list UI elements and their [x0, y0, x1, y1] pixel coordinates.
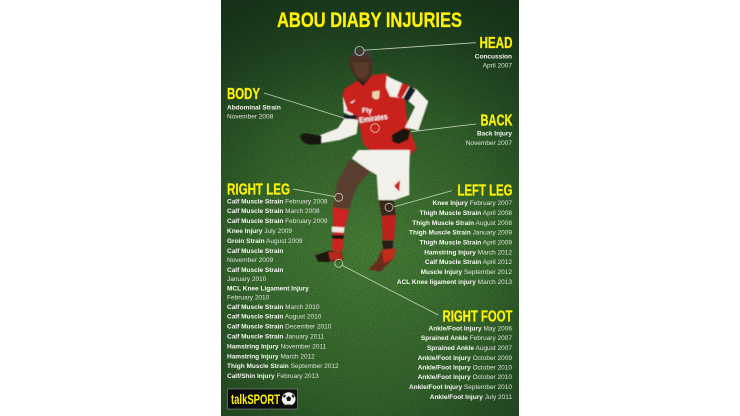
panel: right leg: Calf Muscle Strain December 2010 [227, 324, 332, 330]
panel: right foot: Ankle/Foot Injury October 2009 [418, 355, 512, 362]
panel: right leg: Calf Muscle Strain August 2010 [227, 314, 322, 320]
panel: right foot: Ankle/Foot Injury October 2010 [418, 364, 512, 372]
logo: talkSPORT: talkSPORT [231, 392, 281, 407]
panel: body: Abdominal Strain [227, 104, 281, 111]
panel: left leg: Thigh Muscle Strain April 2009 [420, 240, 512, 246]
panel: back: Back Injury [477, 131, 512, 138]
panel: left leg: Knee Injury February 2007 [432, 200, 512, 207]
panel: left leg [397, 182, 512, 286]
right foot marker [335, 259, 438, 315]
panel: left leg: Hamstring Injury March 2012 [424, 250, 512, 256]
panel: right leg: November 2009 [227, 257, 274, 264]
right leg marker [293, 189, 343, 201]
left leg marker [385, 191, 452, 211]
panel: right leg: Calf Muscle Strain February 2008 [227, 198, 328, 206]
panel: left leg: Thigh Muscle Strain January 2009 [409, 230, 512, 236]
panel: right leg: Calf Muscle Strain [227, 248, 283, 255]
panel: right leg: Groin Strain August 2009 [227, 238, 303, 245]
panel: right leg: Calf Muscle Strain January 2011 [227, 334, 324, 340]
panel: right foot: Ankle/Foot Injury May 2006 [429, 326, 512, 332]
body and back markers [264, 93, 476, 132]
panel: right leg: Calf Muscle Strain [227, 267, 283, 274]
panel: right leg: Calf Muscle Strain March 2010 [227, 304, 320, 311]
panel: right foot: Ankle/Foot Injury September 2010 [409, 384, 512, 391]
panel: body: November 2008 [227, 114, 274, 121]
panel: right leg: Knee Injury July 2009 [227, 228, 292, 235]
panel: back: BACK [480, 112, 513, 130]
panel: right leg: Calf/Shin Injury February 2013 [227, 373, 319, 380]
panel: head: Concussion [475, 53, 512, 60]
panel: back [466, 112, 513, 147]
panel: left leg: ACL Knee ligament injury March 2013 [397, 279, 512, 286]
player upper body: Emirates [358, 112, 389, 125]
panel: left leg: Thigh Muscle Strain April 2008 [420, 210, 512, 217]
panel: right foot: Ankle/Foot Injury July 2011 [430, 394, 512, 401]
player figure [300, 49, 428, 272]
panel: right leg: January 2010 [227, 276, 267, 283]
panel: right leg: RIGHT LEG [227, 182, 290, 198]
panel: right leg: Hamstring Injury March 2012 [227, 354, 315, 360]
panel: right leg: Thigh Muscle Strain September 2012 [227, 363, 339, 370]
panel: left leg: LEFT LEG [458, 182, 512, 200]
panel: back: November 2007 [466, 140, 512, 147]
panel: right leg: Hamstring Injury November 2011 [227, 344, 327, 350]
panel: left leg: Calf Muscle Strain April 2012 [425, 259, 512, 266]
panel: left leg: Thigh Muscle Strain August 2008 [412, 220, 512, 227]
panel: right leg [227, 182, 339, 380]
player upper body [300, 49, 428, 160]
icon: football [282, 392, 296, 406]
panel: body [227, 86, 281, 121]
title: ABOU DIABY INJURIES [277, 9, 462, 32]
panel: head: April 2007 [483, 63, 512, 70]
panel: right foot: RIGHT FOOT [442, 308, 513, 326]
player lower body [315, 150, 410, 272]
panel: right foot: Sprained Ankle February 2007 [421, 335, 512, 342]
panel: right foot: Sprained Ankle August 2007 [427, 345, 512, 352]
head marker [355, 43, 476, 56]
panel: head: HEAD [480, 35, 512, 52]
logo: talkSPORT [228, 389, 298, 409]
marker lines and circles [264, 43, 476, 315]
shirt sponsor: Fly [362, 108, 372, 115]
panel: right foot [409, 308, 513, 401]
panel: right foot: Ankle/Foot Injury October 2010 [418, 374, 512, 381]
panel: right leg: Calf Muscle Strain March 2008 [227, 208, 320, 215]
panel: body: BODY [227, 86, 260, 103]
background: grass pitch [221, 0, 519, 416]
panel: right leg: February 2010 [227, 294, 270, 302]
panel: right leg: MCL Knee Ligament Injury [227, 286, 309, 292]
panel: head [475, 35, 512, 70]
panel: right leg: Calf Muscle Strain February 2009 [227, 218, 328, 225]
panel: left leg: Muscle Injury September 2012 [421, 269, 512, 276]
